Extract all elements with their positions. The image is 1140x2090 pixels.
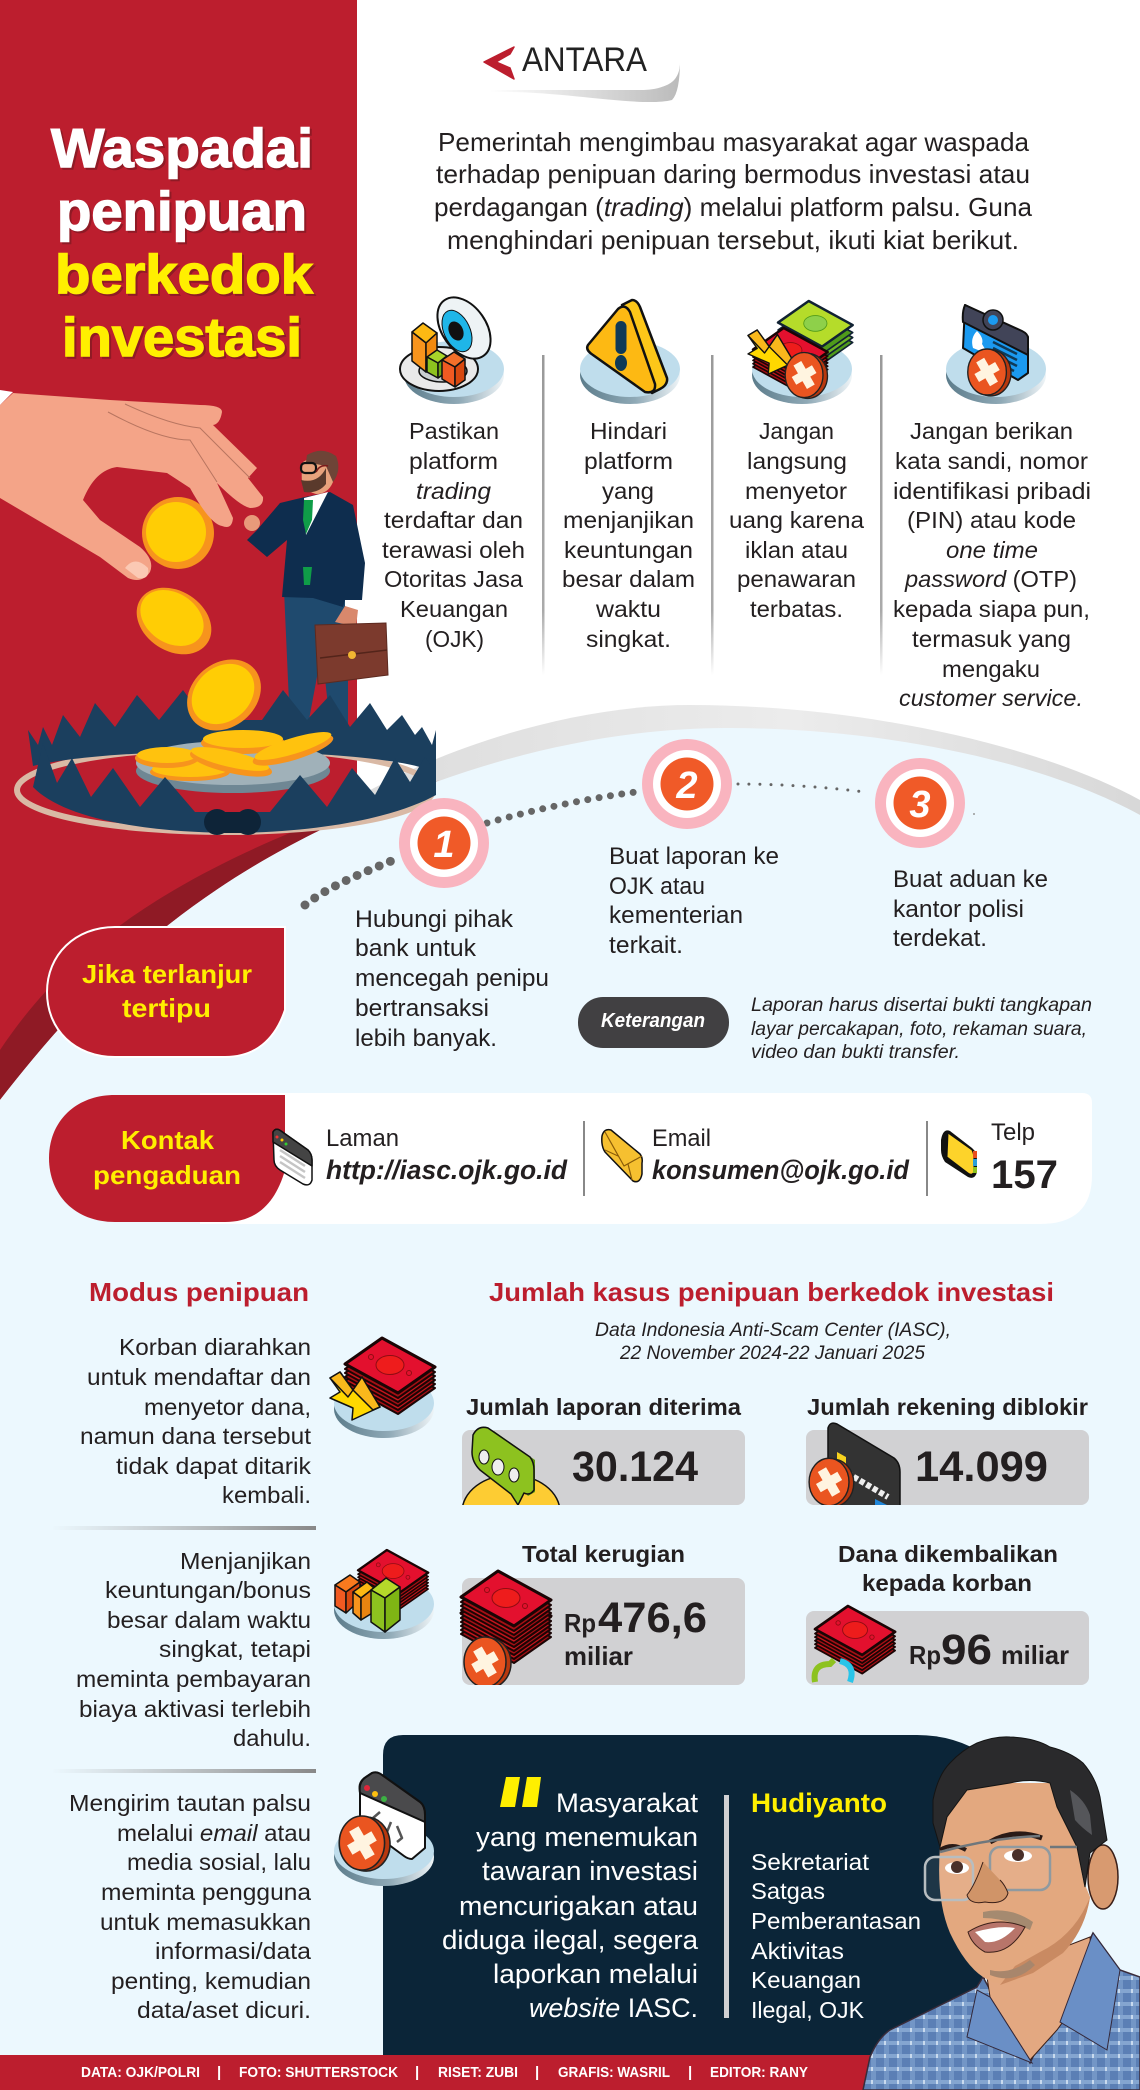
title: Waspadai	[51, 117, 313, 179]
data source: Data Indonesia Anti-Scam Center (IASC),	[595, 1320, 951, 1341]
icon: money with chart	[334, 1550, 434, 1639]
stat: total loss: miliar	[564, 1641, 633, 1671]
icon: browser	[273, 1129, 312, 1185]
step 2 marker: 2	[675, 765, 698, 807]
contact: website	[326, 1125, 567, 1185]
tip 2 text: keuntungan	[564, 537, 693, 563]
modus 1 text	[80, 1334, 312, 1508]
stat: reports received: 30.124	[572, 1443, 698, 1491]
stat: total loss: Total kerugian	[522, 1541, 685, 1567]
illustration: trap front jaw	[33, 743, 436, 835]
column dividers	[542, 355, 882, 675]
step 1 text	[355, 906, 549, 1052]
keterangan badge: Keterangan	[601, 1010, 705, 1032]
icon: money with arrow	[330, 1338, 435, 1438]
icon: envelope	[602, 1130, 642, 1182]
modus 2 text: singkat, tetapi	[159, 1636, 311, 1662]
stat: funds returned: miliar	[1001, 1640, 1069, 1670]
modus 1 text: tidak dapat ditarik	[116, 1453, 312, 1479]
tip 4 text: termasuk yang	[912, 626, 1071, 652]
ANTARA logo	[460, 33, 680, 102]
quote text: website IASC.	[529, 1993, 698, 2023]
modus 3 text: melalui email atau	[117, 1820, 311, 1846]
portrait: Hudiyanto	[863, 1737, 1140, 2090]
step 1 marker: 1	[433, 824, 455, 866]
tip 3 text	[729, 418, 864, 622]
quote text: Masyarakat	[556, 1788, 698, 1818]
panel: quote	[383, 1735, 985, 2055]
tip 1 text: terawasi oleh	[382, 537, 525, 563]
step 1 text: Hubungi pihak	[355, 906, 514, 933]
modus 3 text: informasi/data	[155, 1938, 311, 1964]
step 2 marker	[642, 739, 732, 829]
tip 2 text: menjanjikan	[563, 507, 694, 533]
modus 2 text: dahulu.	[233, 1725, 311, 1751]
step 1 text: bank untuk	[355, 935, 477, 962]
intro paragraph: Pemerintah mengimbau masyarakat agar waspada	[438, 127, 1030, 157]
stat: total loss: 476,6	[598, 1594, 707, 1642]
stat: funds returned: Rp	[909, 1640, 941, 1670]
tip 4 text: customer service.	[899, 685, 1083, 711]
illustration: man with briefcase	[244, 451, 388, 725]
speaker name and role: Ilegal, OJK	[751, 1997, 865, 2023]
modus 1 text: Korban diarahkan	[119, 1334, 311, 1360]
keterangan note: layar percakapan, foto, rekaman suara,	[751, 1019, 1087, 1040]
title: penipuan	[57, 180, 307, 242]
tip 1 text: Otoritas Jasa	[384, 566, 523, 592]
speaker name and role: Satgas	[751, 1878, 825, 1904]
illustration: falling coins	[124, 574, 275, 745]
heading: Jumlah kasus: Jumlah kasus penipuan berkedok investasi	[489, 1277, 1054, 1307]
stat: reports received: Jumlah laporan diterima	[466, 1394, 741, 1420]
background: red panel	[0, 0, 357, 1062]
step 2 text: kementerian	[609, 902, 743, 929]
panel: contact bar	[200, 1093, 1092, 1224]
speaker name and role: Pemberantasan	[751, 1908, 921, 1934]
step 3 text	[893, 866, 1048, 952]
tip 2 text: yang	[602, 478, 654, 504]
step 2 text	[609, 843, 779, 959]
step 2 text: Buat laporan ke	[609, 843, 779, 870]
contact: phone: Telp	[991, 1119, 1035, 1146]
title	[51, 117, 313, 368]
step 1 marker	[399, 798, 489, 888]
stat: funds returned	[806, 1541, 1089, 1685]
speaker name and role: Sekretariat	[751, 1849, 870, 1875]
modus 2 text	[76, 1548, 311, 1751]
modus 2 text: meminta pembayaran	[76, 1666, 311, 1692]
icon: id card	[946, 305, 1046, 404]
modus 3 text: media sosial, lalu	[127, 1849, 311, 1875]
modus 3 text: Mengirim tautan palsu	[69, 1790, 311, 1816]
tip 1 text: Pastikan	[409, 418, 499, 444]
contact: phone	[991, 1119, 1058, 1197]
contact: website: Laman	[326, 1125, 399, 1152]
modus 3 text: penting, kemudian	[111, 1968, 311, 1994]
contact: phone: 157	[991, 1153, 1058, 1197]
icon: code window	[334, 1772, 434, 1886]
tip 1 text: terdaftar dan	[384, 507, 523, 533]
keterangan note: Laporan harus disertai bukti tangkapan	[751, 995, 1092, 1016]
tip 1 text	[382, 418, 525, 652]
label: Kontak pengaduan	[49, 1095, 285, 1222]
stat: funds returned: Dana dikembalikan	[838, 1541, 1058, 1567]
quote mark	[500, 1777, 541, 1807]
step 1 text: lebih banyak.	[355, 1025, 497, 1052]
keterangan note	[751, 995, 1092, 1063]
modus 2 text: Menjanjikan	[180, 1548, 311, 1574]
stat: funds returned: kepada korban	[862, 1570, 1032, 1596]
heading: Modus penipuan: Modus penipuan	[89, 1277, 309, 1307]
footer bar	[0, 2055, 880, 2090]
stat: accounts blocked: Jumlah rekening diblokir	[807, 1394, 1088, 1420]
tip 3 text: uang karena	[729, 507, 864, 533]
tip 1 text: (OJK)	[425, 626, 484, 652]
tip 4 text: mengaku	[942, 656, 1040, 682]
quote text: diduga ilegal, segera	[442, 1925, 699, 1955]
intro paragraph: terhadap penipuan daring bermodus investasi atau	[436, 159, 1030, 189]
tip 4 text: (PIN) atau kode	[907, 507, 1076, 533]
step 1 text: bertransaksi	[355, 995, 489, 1022]
speaker name and role: Keuangan	[751, 1967, 861, 1993]
step 3 marker: 3	[909, 784, 931, 826]
tip 1 text: trading	[416, 478, 491, 504]
tip 4 text: kata sandi, nomor	[895, 448, 1088, 474]
quote text: yang menemukan	[476, 1822, 698, 1852]
tip 1 text: platform	[409, 448, 498, 474]
tip 4 text: one time	[946, 537, 1038, 563]
step 3 marker	[875, 758, 965, 848]
keterangan note: video dan bukti transfer.	[751, 1042, 960, 1063]
speaker name and role: Hudiyanto	[751, 1788, 887, 1818]
keterangan badge	[578, 997, 729, 1048]
tip 2 text: Hindari	[590, 418, 667, 444]
modus 3 text	[69, 1790, 311, 2023]
step 1 text: mencegah penipu	[355, 965, 549, 992]
illustration: plate with coins	[135, 727, 336, 793]
title: investasi	[62, 306, 302, 368]
contact: email: Email	[652, 1125, 711, 1152]
tip 1 text: Keuangan	[400, 596, 508, 622]
modus 1 text: kembali.	[222, 1482, 311, 1508]
tip 2 text: waktu	[595, 596, 661, 622]
tip 3 text: langsung	[747, 448, 847, 474]
modus 3 text: untuk memasukkan	[100, 1909, 311, 1935]
footer credits: |	[535, 2064, 539, 2081]
illustration: hand holding coin	[0, 390, 263, 580]
tip 3 text: menyetor	[745, 478, 847, 504]
stat: total loss	[461, 1541, 745, 1688]
stat: total loss: Rp	[564, 1608, 596, 1638]
label: Jika terlanjur tertipu: Jika terlanjur	[82, 959, 252, 989]
tip 2 text	[562, 418, 695, 652]
title: berkedok	[55, 243, 313, 305]
step 3 text: terdekat.	[893, 925, 987, 952]
footer credits	[81, 2064, 808, 2081]
tip 4 text	[893, 418, 1091, 711]
footer credits: FOTO: SHUTTERSTOCK	[239, 2064, 398, 2081]
quote text: laporkan melalui	[493, 1959, 698, 1989]
footer credits: RISET: ZUBI	[438, 2064, 518, 2081]
modus 2 text: besar dalam waktu	[107, 1607, 311, 1633]
speaker name and role: Aktivitas	[751, 1938, 844, 1964]
stat: funds returned: 96	[941, 1626, 992, 1674]
icon: money and coin	[748, 301, 853, 404]
tip 2 text: besar dalam	[562, 566, 695, 592]
stat: accounts blocked: 14.099	[915, 1443, 1048, 1491]
label: Kontak pengaduan: pengaduan	[93, 1160, 241, 1190]
tip 2 text: platform	[584, 448, 673, 474]
tip 4 text: password (OTP)	[904, 566, 1077, 592]
intro paragraph: perdagangan (trading) melalui platform palsu. Guna	[434, 192, 1033, 222]
data source	[595, 1320, 951, 1364]
intro paragraph	[434, 127, 1033, 255]
footer credits: |	[415, 2064, 419, 2081]
ANTARA logo: ANTARA	[522, 41, 647, 79]
modus 1 text: untuk mendaftar dan	[87, 1364, 311, 1390]
modus 2 text: keuntungan/bonus	[105, 1577, 311, 1603]
footer credits: GRAFIS: WASRIL	[558, 2064, 670, 2081]
tip 3 text: iklan atau	[745, 537, 848, 563]
footer credits: EDITOR: RANY	[710, 2064, 808, 2081]
quote text	[442, 1788, 699, 2023]
quote text: mencurigakan atau	[459, 1891, 698, 1921]
data source: 22 November 2024-22 Januari 2025	[619, 1343, 925, 1364]
stat: reports received	[462, 1398, 745, 1505]
step connector dots	[305, 784, 975, 905]
footer credits: DATA: OJK/POLRI	[81, 2064, 200, 2081]
background: grey arc	[270, 705, 1140, 1000]
step 2 text: OJK atau	[609, 873, 705, 900]
background: light blue curved area	[0, 728, 1140, 2090]
tip 3 text: terbatas.	[750, 596, 843, 622]
contact: email: konsumen@ojk.go.id	[652, 1155, 909, 1185]
modus 2 text: biaya aktivasi terlebih	[79, 1696, 311, 1722]
footer credits: |	[688, 2064, 692, 2081]
step 2 text: terkait.	[609, 932, 683, 959]
icon: eye and chart	[400, 288, 504, 404]
modus 1 text: menyetor dana,	[144, 1394, 311, 1420]
intro paragraph: menghindari penipuan tersebut, ikuti kiat berikut.	[447, 225, 1019, 255]
tip 4 text: Jangan berikan	[910, 418, 1073, 444]
tip 2 text: singkat.	[586, 626, 671, 652]
tip 3 text: Jangan	[759, 418, 834, 444]
background: dark red band	[0, 780, 440, 1100]
modus 3 text: data/aset dicuri.	[137, 1997, 311, 2023]
label: Jika terlanjur tertipu	[47, 927, 285, 1057]
stat: accounts blocked	[806, 1394, 1089, 1510]
footer credits: |	[217, 2064, 221, 2081]
tip 4 text: identifikasi pribadi	[893, 478, 1091, 504]
tip 3 text: penawaran	[737, 566, 856, 592]
icon: warning triangle	[580, 300, 680, 404]
label: Kontak pengaduan: Kontak	[121, 1125, 215, 1155]
contact: website: http://iasc.ojk.go.id	[326, 1155, 567, 1185]
illustration: trap back jaw	[17, 690, 436, 832]
step 3 text: Buat aduan ke	[893, 866, 1048, 893]
label: Jika terlanjur tertipu: tertipu	[122, 993, 211, 1023]
modus 1 text: namun dana tersebut	[80, 1423, 312, 1449]
icon: phone	[941, 1130, 977, 1178]
modus 3 text: meminta pengguna	[101, 1879, 311, 1905]
contact: email	[652, 1125, 909, 1185]
tip 4 text: kepada siapa pun,	[893, 596, 1090, 622]
quote text: tawaran investasi	[482, 1856, 698, 1886]
speaker name and role	[751, 1788, 921, 2023]
step 3 text: kantor polisi	[893, 896, 1024, 923]
